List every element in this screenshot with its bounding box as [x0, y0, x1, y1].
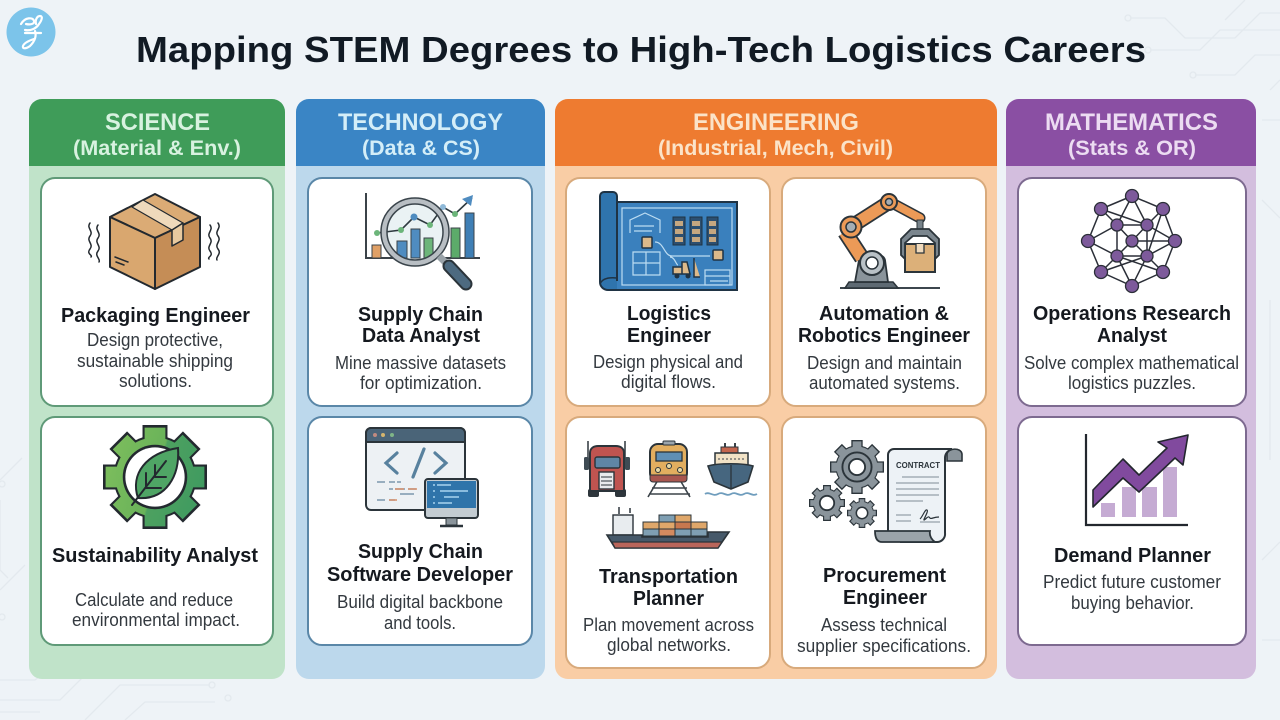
card: logistics engineer: [566, 178, 770, 406]
engineering header: ENGINEERING: [693, 109, 859, 136]
panel: science: [29, 99, 285, 679]
card: packaging engineer: Design protective,: [87, 329, 223, 350]
card: transportation planner: Transportation: [599, 566, 738, 588]
card: procurement engineer: Assess technical: [821, 614, 947, 635]
card: operations research analyst: Analyst: [1097, 325, 1167, 347]
card: demand planner: Demand Planner: [1054, 545, 1211, 567]
technology header: [296, 99, 545, 166]
card: automation and robotics engineer: Automation &: [819, 303, 949, 325]
card: supply chain data analyst: Data Analyst: [362, 325, 480, 347]
card: sustainability analyst: environmental impact.: [72, 609, 240, 630]
icon: rising trend chart: [1086, 434, 1188, 525]
card: logistics engineer: Design physical and: [593, 351, 743, 372]
card: logistics engineer: digital flows.: [621, 371, 716, 392]
mathematics header: [1006, 99, 1256, 166]
card: procurement engineer: [782, 417, 986, 668]
panel: engineering: [555, 99, 997, 679]
card: transportation planner: global networks.: [607, 634, 731, 655]
icon: gears and contract: [809, 440, 962, 542]
card: operations research analyst: logistics puzzles.: [1068, 372, 1196, 393]
card: logistics engineer: Engineer: [627, 325, 711, 347]
card: demand planner: Predict future customer: [1043, 571, 1221, 592]
card: transportation planner: Plan movement across: [583, 614, 754, 635]
card: supply chain data analyst: Mine massive datasets: [335, 352, 506, 373]
card: sustainability analyst: [41, 417, 273, 645]
icon: truck train and ships: [584, 441, 757, 548]
panel: mathematics: [1006, 99, 1256, 679]
science header: SCIENCE: [105, 109, 210, 136]
icon: truck: [584, 441, 630, 497]
card: operations research analyst: Operations Research: [1033, 303, 1231, 325]
icon: magnified chart: [366, 193, 480, 284]
icon: ferry: [705, 443, 757, 495]
card: procurement engineer: supplier specifications.: [797, 635, 971, 656]
engineering header: [555, 99, 997, 166]
icon: gears and contract: CONTRACT: [896, 460, 941, 470]
card: operations research analyst: Solve complex mathematical: [1024, 352, 1239, 373]
card: procurement engineer: Engineer: [843, 587, 927, 609]
science header: [29, 99, 285, 166]
card: automation and robotics engineer: Design and maintain: [807, 352, 962, 373]
card: demand planner: buying behavior.: [1071, 592, 1194, 613]
card: transportation planner: Planner: [633, 588, 704, 610]
icon: code window and monitor: [366, 428, 478, 526]
card: transportation planner: [566, 417, 770, 668]
card: supply chain software developer: [308, 417, 532, 645]
card: supply chain software developer: and tools.: [384, 612, 456, 633]
title: Mapping STEM Degrees to High-Tech Logistics Careers: [136, 29, 1146, 70]
icon: cargo ship: [607, 507, 729, 548]
card: operations research analyst: [1018, 178, 1246, 406]
card: supply chain software developer: Supply Chain: [358, 541, 483, 563]
mathematics header: (Stats & OR): [1068, 137, 1196, 160]
technology header: TECHNOLOGY: [338, 109, 503, 136]
card: demand planner: [1018, 417, 1246, 645]
card: automation and robotics engineer: [782, 178, 986, 406]
science header: (Material & Env.): [73, 137, 241, 160]
icon: network graph: [1082, 190, 1182, 292]
icon: train: [648, 441, 690, 497]
card: automation and robotics engineer: automated systems.: [809, 372, 960, 393]
card: automation and robotics engineer: Robotics Engineer: [798, 325, 970, 347]
icon: cardboard box: [89, 194, 219, 289]
panel: technology: [296, 99, 545, 679]
icon: leaf gear: [103, 425, 207, 529]
card: sustainability analyst: Sustainability Analyst: [52, 545, 258, 567]
card: supply chain software developer: Build digital backbone: [337, 591, 503, 612]
icon: warehouse blueprint: [600, 192, 737, 290]
card: packaging engineer: sustainable shipping: [77, 350, 233, 371]
logo: [6, 8, 56, 56]
card: packaging engineer: solutions.: [119, 370, 192, 391]
icon: robot arm: [840, 194, 940, 288]
card: supply chain data analyst: [308, 178, 532, 406]
mathematics header: MATHEMATICS: [1045, 109, 1218, 136]
card: supply chain data analyst: Supply Chain: [358, 304, 483, 326]
technology header: (Data & CS): [362, 137, 480, 160]
card: sustainability analyst: Calculate and reduce: [75, 589, 233, 610]
card: supply chain data analyst: for optimization.: [360, 372, 482, 393]
card: packaging engineer: [41, 178, 273, 406]
card: logistics engineer: Logistics: [627, 303, 711, 325]
card: packaging engineer: Packaging Engineer: [61, 305, 250, 327]
engineering header: (Industrial, Mech, Civil): [658, 137, 893, 160]
card: procurement engineer: Procurement: [823, 565, 946, 587]
card: supply chain software developer: Software Developer: [327, 564, 513, 586]
